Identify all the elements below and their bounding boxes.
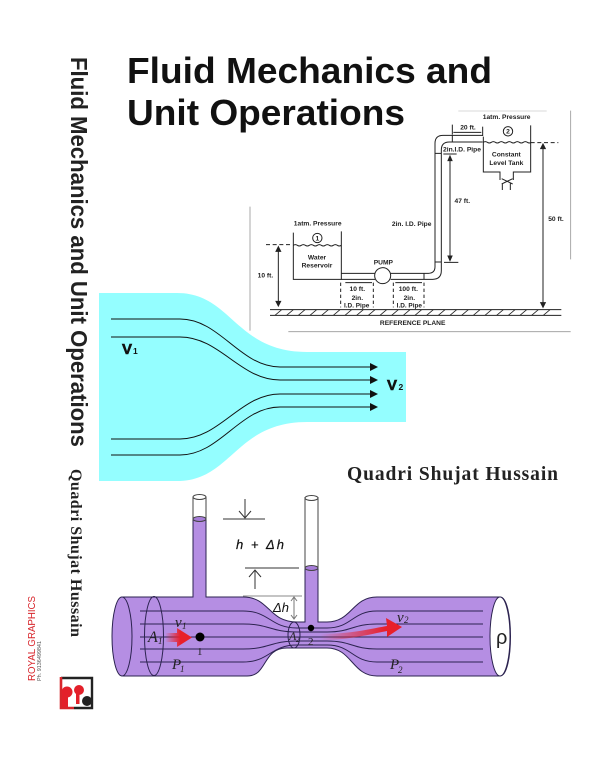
labels: A xyxy=(147,629,158,646)
labels: 1 xyxy=(158,636,162,646)
publisher logo xyxy=(61,677,92,708)
dimension labels: I.D. Pipe xyxy=(397,302,422,309)
flow arrows xyxy=(166,628,192,647)
converging flow diagram xyxy=(99,293,406,481)
venturi diagram xyxy=(112,494,510,676)
labels: 1 xyxy=(180,664,184,674)
dimension labels xyxy=(258,125,564,327)
tank: constant level: Constant xyxy=(492,151,522,158)
dimension labels: 2in. I.D. Pipe xyxy=(392,221,432,228)
spine title: Fluid Mechanics and Unit Operations xyxy=(66,57,92,447)
dimension labels: 50 ft. xyxy=(548,216,564,223)
publisher phone: Ph. 9136499841 xyxy=(37,641,43,681)
labels: 1 xyxy=(182,621,186,631)
labels xyxy=(147,610,409,675)
converging flow diagram: 2 xyxy=(398,382,404,392)
venturi tube body xyxy=(112,519,510,676)
pipe run and pump: PUMP xyxy=(374,260,394,267)
dimension labels: 20 ft. xyxy=(460,125,476,132)
publisher name xyxy=(26,596,43,681)
labels: 2 xyxy=(296,636,300,644)
tank: water reservoir: 1 xyxy=(315,235,319,242)
dimension labels: 10 ft. xyxy=(350,286,365,293)
piping system diagram xyxy=(250,111,571,332)
spine author: Quadri Shujat Hussain xyxy=(67,469,84,637)
title: Fluid Mechanics and xyxy=(127,50,492,91)
dimension labels: 2in. xyxy=(352,295,363,302)
tank: constant level: 2 xyxy=(506,129,510,136)
streamlines xyxy=(140,611,483,662)
labels: P xyxy=(171,657,181,673)
author: Quadri Shujat Hussain xyxy=(347,464,558,485)
dimension labels: REFERENCE PLANE xyxy=(380,320,446,327)
labels: P xyxy=(389,657,399,673)
tank: water reservoir: Water xyxy=(308,254,327,261)
cyan channel xyxy=(99,293,406,481)
reference plane xyxy=(270,310,561,315)
converging flow diagram: V xyxy=(387,377,397,394)
piezometer tubes xyxy=(193,494,318,570)
dimension labels: I.D. Pipe xyxy=(344,302,370,309)
tank: water reservoir: Reservoir xyxy=(302,263,333,270)
dimension labels: 100 ft. xyxy=(399,286,418,293)
tank: constant level: Level Tank xyxy=(489,160,524,167)
arrowheads xyxy=(370,363,378,411)
converging flow diagram: 1 xyxy=(133,346,138,356)
pipe run and pump xyxy=(341,127,483,284)
title: Unit Operations xyxy=(127,92,405,133)
venturi diagram: 1 xyxy=(197,646,202,658)
streamlines xyxy=(111,319,372,455)
dimension labels: 2in. xyxy=(404,295,415,302)
title xyxy=(127,50,492,133)
labels: 2 xyxy=(398,665,403,675)
dimension labels: 2in.I.D. Pipe xyxy=(443,147,481,154)
measurement points xyxy=(196,632,204,642)
cross sections xyxy=(112,596,510,676)
dimension labels: 47 ft. xyxy=(455,198,470,205)
labels: v xyxy=(397,610,404,626)
dimension labels: 10 ft. xyxy=(258,273,273,280)
labels: 2 xyxy=(404,615,409,625)
venturi diagram: Δh xyxy=(272,600,289,615)
venturi diagram: h + Δh xyxy=(236,537,284,552)
tank: water reservoir: 1atm. Pressure xyxy=(294,220,342,227)
labels: A xyxy=(288,629,297,643)
tank: constant level: 1atm. Pressure xyxy=(483,114,531,121)
velocity labels: V xyxy=(122,341,132,358)
labels: v xyxy=(175,615,182,631)
tank: water reservoir xyxy=(266,220,342,279)
publisher name: ROYAL GRAPHICS xyxy=(26,596,38,681)
venturi diagram: ρ xyxy=(496,627,507,649)
tank: constant level xyxy=(483,114,558,190)
venturi diagram: 2 xyxy=(308,636,314,648)
height dimension xyxy=(223,499,302,619)
